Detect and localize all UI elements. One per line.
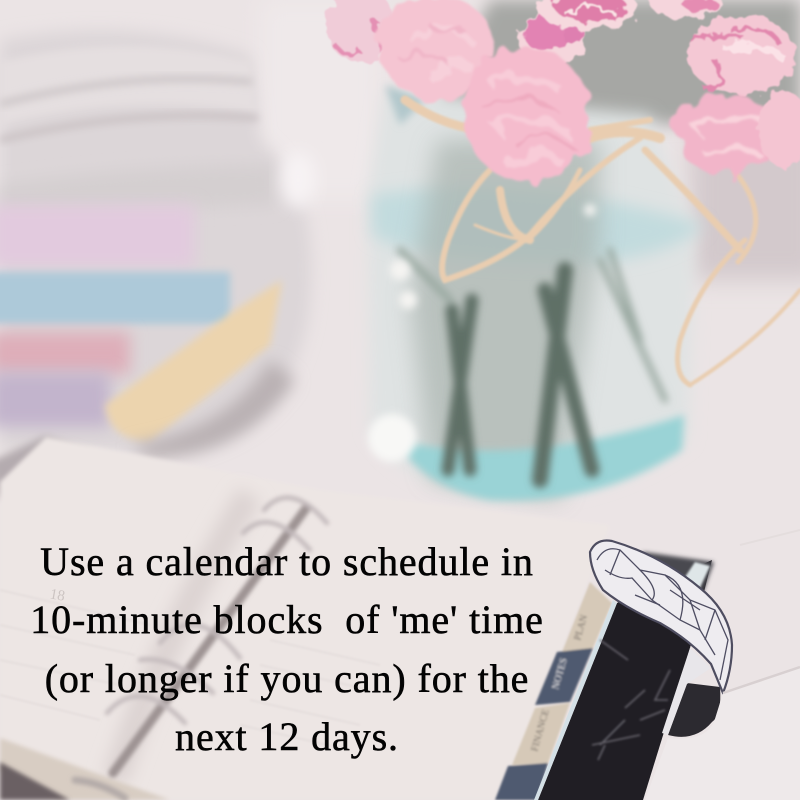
flower: upper left bbox=[379, 0, 495, 100]
caption text block: next 12 days. bbox=[175, 714, 399, 759]
planner section tabs: PLAN bbox=[572, 614, 590, 642]
page rule lines bbox=[0, 590, 380, 750]
page edges at bottom bbox=[0, 738, 170, 800]
right desk boards bbox=[645, 667, 800, 800]
planner section tabs: FINANCE bbox=[529, 708, 552, 753]
caption text block bbox=[30, 539, 544, 759]
open planner pages bbox=[0, 437, 610, 800]
flower: top right edge bbox=[650, 0, 722, 19]
inner loop of clasp bbox=[668, 683, 720, 737]
caption text block: Use a calendar to schedule in bbox=[40, 539, 534, 584]
caption text block: 10-minute blocks of 'me' time bbox=[30, 597, 544, 642]
raffia twine bow bbox=[405, 100, 800, 385]
dark foliage behind flowers bbox=[430, 0, 800, 240]
glass jar with coloured contents bbox=[0, 30, 316, 458]
ring binder spine and rings bbox=[75, 498, 327, 798]
crackled clasp strap bbox=[590, 540, 732, 693]
black leather planner cover bbox=[534, 552, 714, 800]
flower: right upper bbox=[688, 15, 796, 95]
planner section tabs: NOTES bbox=[550, 657, 570, 691]
flower: magenta bud bbox=[519, 11, 585, 65]
flower: far left bbox=[326, 0, 394, 63]
white strip by clasp bbox=[662, 648, 711, 735]
caption text block: (or longer if you can) for the bbox=[45, 656, 529, 701]
flower: right lower bbox=[677, 93, 777, 177]
date number on the page: 18 bbox=[49, 586, 66, 605]
flower: centre large bbox=[463, 49, 591, 181]
dark desk edge behind planner bbox=[0, 436, 90, 500]
glass vase with water and stems bbox=[368, 85, 705, 500]
back wall shading bbox=[690, 130, 800, 280]
flower: top centre bbox=[538, 0, 638, 30]
planner section tabs bbox=[495, 582, 612, 800]
pink carnation flowers bbox=[326, 0, 800, 181]
flower: far right bbox=[759, 92, 800, 168]
